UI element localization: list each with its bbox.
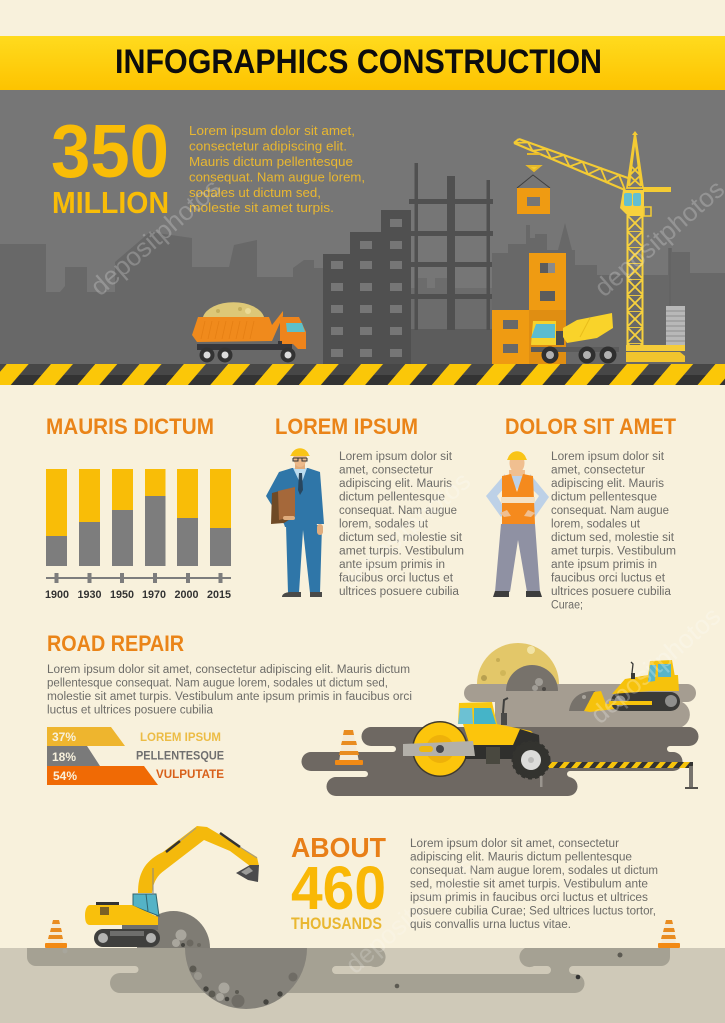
tower crane: [514, 131, 685, 362]
text column: lorem ipsum: faucibus orci luctus et: [339, 572, 454, 584]
bottom text block: quis convallis urna luctus vitae.: [410, 919, 571, 931]
year labels: 1950: [110, 589, 134, 601]
text column: lorem ipsum: lorem, sodales ut: [339, 518, 429, 530]
text column: lorem ipsum: adipiscing elit. Mauris: [339, 478, 452, 490]
text column: dolor sit amet: dictum sed, molestie sit: [551, 532, 675, 544]
text column: dolor sit amet: amet, consectetur: [551, 464, 645, 476]
road repair illustration: [302, 643, 698, 796]
text column: lorem ipsum: ultrices posuere cubilia: [339, 586, 460, 598]
bottom text block: consequat. Nam augue lorem, sodales ut dictum: [410, 865, 658, 877]
header band: [0, 36, 725, 90]
text column: lorem ipsum: Lorem ipsum dolor sit: [339, 451, 453, 463]
hazard stripe: [0, 364, 725, 385]
pebbles in road: [62, 948, 622, 988]
road repair text: pellentesque consequat. Nam augue lorem, sodales ut dictum sed,: [47, 678, 388, 690]
big number 350: 350: [51, 109, 169, 193]
bottom text block: ipsum primis in faucibus orci luctus et ultrices: [410, 892, 648, 904]
bottom text block: Lorem ipsum dolor sit amet, consectetur: [410, 838, 619, 850]
text column: dolor sit amet: faucibus orci luctus et: [551, 572, 666, 584]
text column: dolor sit amet: Lorem ipsum dolor sit: [551, 451, 665, 463]
heading: mauris dictum: MAURIS DICTUM: [46, 414, 214, 439]
heading: lorem ipsum: LOREM IPSUM: [275, 414, 418, 439]
heading: road repair: ROAD REPAIR: [47, 631, 184, 656]
road repair text: molestie sit amet turpis. Vestibulum ante ipsum primis in faucibus orci: [47, 691, 412, 703]
skyline silhouette: [0, 232, 330, 364]
percentage bars: VULPUTATE: [156, 767, 224, 781]
text column: dolor sit amet: amet turpis. Vestibulum: [551, 546, 676, 558]
road repair text: [47, 664, 412, 716]
text column: lorem ipsum: amet turpis. Vestibulum: [339, 546, 464, 558]
hanging concrete block: [517, 175, 550, 214]
figure: engineer in suit: [266, 448, 324, 597]
year labels: 1930: [78, 589, 102, 601]
bottom text block: posuere cubilia Curae; Sed ultrices luctus tortor,: [410, 906, 656, 918]
road repair text: Lorem ipsum dolor sit amet, consectetur adipiscing elit. Mauris dictum: [47, 664, 410, 676]
text column: dolor sit amet: dictum pellentesque: [551, 492, 657, 504]
watermarks: [84, 173, 725, 980]
text column: dolor sit amet: ultrices posuere cubilia: [551, 586, 672, 598]
percentage bars: LOREM IPSUM: [140, 730, 221, 744]
road repair text: luctus et ultrices posuere cubilia: [47, 704, 214, 716]
intro text: molestie sit amet turpis.: [189, 201, 334, 215]
text column: lorem ipsum: dictum pellentesque: [339, 492, 445, 504]
year labels: 1900: [45, 589, 69, 601]
road layers: [27, 948, 670, 993]
percentage bars: 37%: [52, 730, 76, 744]
watermarks: depositphotos: [339, 851, 481, 980]
dark asphalt road: [302, 727, 698, 796]
year labels: [45, 589, 231, 601]
stacked bar chart: [45, 469, 231, 601]
traffic cone right: [658, 920, 680, 948]
concrete slab stack: [666, 248, 685, 345]
dark apartment block: [323, 210, 411, 364]
panel: city construction scene: [0, 90, 725, 364]
orange building under construction: [492, 253, 566, 364]
year labels: 1970: [142, 589, 166, 601]
text column: dolor sit amet: adipiscing elit. Mauris: [551, 478, 664, 490]
skyline behind scaffold: [411, 278, 492, 364]
steel frame scaffold: [409, 163, 493, 364]
excavation pit: [185, 948, 307, 1009]
asphalt mound: [506, 665, 558, 691]
percentage bars: 18%: [52, 750, 76, 764]
bottom text block: [410, 838, 658, 931]
traffic cone: [335, 730, 363, 765]
text column: lorem ipsum: dictum sed, molestie sit: [339, 532, 463, 544]
intro text: Mauris dictum pellentesque: [189, 155, 353, 169]
text column: lorem ipsum: [339, 451, 464, 598]
excavator: [85, 826, 259, 947]
ground band: [0, 948, 725, 1023]
intro text: Lorem ipsum dolor sit amet,: [189, 124, 355, 138]
text column: lorem ipsum: amet, consectetur: [339, 464, 433, 476]
dirt mound: [137, 911, 210, 948]
intro text: sodales ut dictum sed,: [189, 186, 321, 200]
watermarks: depositphotos: [334, 466, 476, 595]
text column: lorem ipsum: ante ipsum primis in: [339, 559, 445, 571]
title: INFOGRAPHICS CONSTRUCTION: [115, 43, 602, 81]
bottom text block: sed, molestie sit amet turpis. Vestibulum ante: [410, 878, 648, 890]
intro text: consectetur adipiscing elit.: [189, 140, 347, 154]
figure: worker in vest: [486, 451, 549, 597]
million label: MILLION: [52, 185, 169, 220]
upper road: [464, 684, 696, 728]
text column: dolor sit amet: ante ipsum primis in: [551, 559, 657, 571]
percentage bars: PELLENTESQUE: [136, 748, 224, 762]
percentage bars: 54%: [53, 769, 77, 783]
watermarks: depositphotos: [584, 601, 725, 730]
concrete mixer truck: [531, 313, 619, 364]
watermarks: depositphotos: [84, 173, 226, 302]
bottom text block: adipiscing elit. Mauris dictum pellentesque: [410, 852, 632, 864]
heading: dolor sit amet: DOLOR SIT AMET: [505, 414, 677, 439]
percentage bars: [47, 727, 224, 785]
stat: thousands: THOUSANDS: [291, 915, 382, 933]
text column: dolor sit amet: Curae;: [551, 600, 583, 612]
barrier tape: [540, 762, 698, 789]
year labels: 2015: [207, 589, 231, 601]
text column: dolor sit amet: [551, 451, 676, 612]
dump truck: [192, 302, 306, 362]
text column: dolor sit amet: lorem, sodales ut: [551, 518, 641, 530]
road roller: [403, 698, 550, 778]
right skyline silhouette: [492, 223, 725, 364]
traffic cone left: [45, 920, 67, 948]
sand pile: [477, 643, 559, 684]
text column: dolor sit amet: consequat. Nam augue: [551, 505, 669, 517]
stat: 460: 460: [291, 854, 386, 922]
intro text: [189, 124, 365, 215]
bulldozer: [569, 660, 680, 712]
stat: about: ABOUT: [291, 832, 386, 863]
intro text: consequat. Nam augue lorem,: [189, 170, 365, 184]
text column: lorem ipsum: consequat. Nam augue: [339, 505, 457, 517]
year labels: 2000: [174, 589, 198, 601]
